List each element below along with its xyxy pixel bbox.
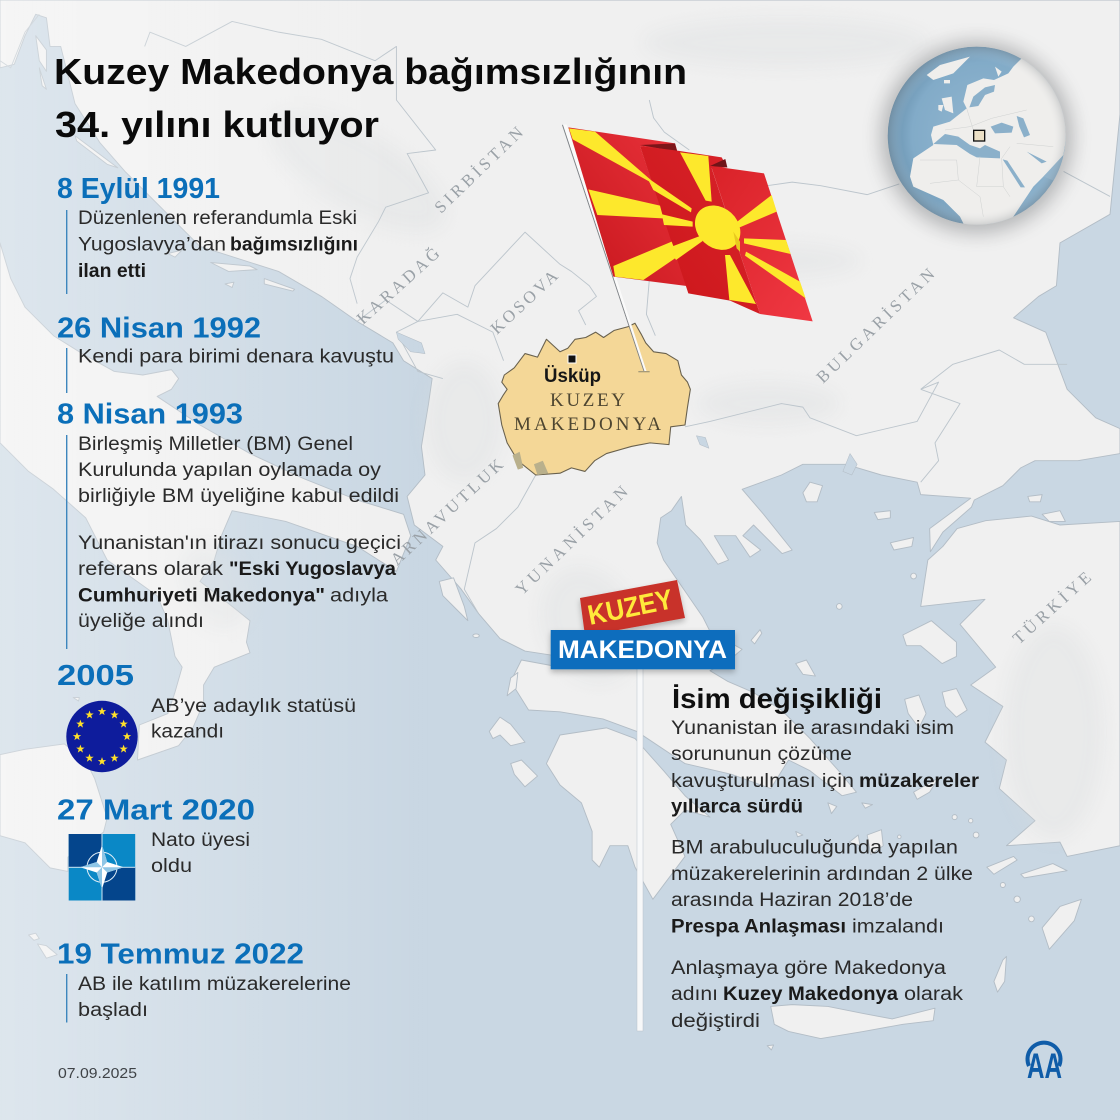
timeline entry: 2005: AB’ye adaylık statüsü (151, 696, 356, 717)
country label: Kuzey Makedonya: MAKEDONYA (514, 414, 664, 435)
timeline entry: 8 Eylül 1991: ilan etti (78, 261, 146, 282)
country label: Sırbistan: SIRBİSTAN (431, 122, 528, 217)
sign plate: Makedonya: MAKEDONYA (558, 636, 727, 664)
text block: Prespa agreement: imzalandı (852, 916, 944, 938)
panel: name change (671, 683, 980, 1032)
text block: negotiations: yıllarca sürdü (671, 796, 803, 818)
timeline entry: 27 Mart 2020: oldu (151, 856, 192, 877)
country label: Karadağ: KARADAĞ (353, 243, 444, 328)
title: Kuzey Makedonya bağımsızlığının (54, 51, 687, 92)
country label: Bulgaristan: BULGARİSTAN (813, 263, 939, 387)
text block: renaming: olarak (904, 984, 964, 1005)
timeline entry: 8 Nisan 1993: referans olarak (78, 559, 224, 580)
text block: negotiations: müzakereler (859, 771, 980, 792)
timeline entry: 8 Eylül 1991: Yugoslavya’dan (78, 234, 226, 256)
text block: renaming: adını (671, 984, 718, 1005)
city label: Üsküp: Üsküp (544, 364, 601, 387)
globe locator square (974, 130, 985, 141)
timeline entry: 2005: 2005 (57, 660, 134, 692)
text block: negotiations: sorununun çözüme (671, 744, 852, 765)
timeline entry: 8 Nisan 1993: Birleşmiş Milletler (BM) Genel (78, 434, 353, 455)
text block: Prespa agreement: BM arabuluculuğunda yapılan (671, 838, 958, 858)
timeline entry: 27 Mart 2020: 27 Mart 2020 (57, 794, 255, 826)
text block: Prespa agreement: Prespa Anlaşması (671, 916, 846, 938)
timeline entry: 8 Nisan 1993: Kurulunda yapılan oylamada oy (78, 460, 382, 481)
lakes (396, 332, 857, 475)
left side light overlay (0, 0, 430, 1120)
text block: Prespa agreement: müzakerelerinin ardından 2 ülke (671, 864, 973, 885)
heading: İsim değişikliği: İsim değişikliği (672, 683, 882, 714)
text block: renaming (671, 958, 964, 1032)
timeline entry: 2005 (57, 660, 356, 772)
timeline entry: 8 Nisan 1993: birliğiyle BM üyeliğine kabul edildi (78, 486, 399, 507)
timeline entry: 8 Nisan 1993: "Eski Yugoslavya (229, 559, 396, 580)
flag pole (562, 125, 650, 372)
country label: Arnavutluk: ARNAVUTLUK (387, 454, 508, 569)
timeline entry: 19 Temmuz 2022: başladı (78, 1000, 148, 1021)
flag of North Macedonia (562, 125, 813, 372)
timeline entry: 19 Temmuz 2022: 19 Temmuz 2022 (57, 938, 304, 970)
terrain shading (163, 18, 1104, 839)
title (54, 51, 687, 145)
timeline entry: 8 Eylül 1991: Düzenlenen referandumla Eski (78, 208, 357, 229)
timeline entry: 26 Nisan 1992: 26 Nisan 1992 (57, 312, 261, 344)
timeline entry: 19 Temmuz 2022 (57, 938, 351, 1022)
text block: renaming: Kuzey Makedonya (723, 984, 898, 1005)
country label: Kuzey Makedonya (514, 390, 664, 435)
text block: renaming: değiştirdi (671, 1011, 760, 1032)
timeline entry: 8 Eylül 1991: bağımsızlığını (230, 234, 358, 256)
sign pole (637, 665, 643, 1031)
timeline entry: 2005: kazandı (151, 722, 224, 742)
timeline entry: 8 Nisan 1993: Cumhuriyeti Makedonya" (78, 586, 325, 606)
islands (29, 578, 538, 958)
title: 34. yılını kutluyor (55, 104, 379, 145)
icon: AA logo: AA (1027, 1047, 1062, 1086)
text block: renaming: Anlaşmaya göre Makedonya (671, 958, 946, 979)
North Macedonia highlighted on map (498, 323, 690, 475)
timeline entry: 8 Nisan 1993: adıyla (330, 586, 388, 606)
timeline entry: 27 Mart 2020 (57, 794, 255, 900)
timeline entry: 8 Nisan 1993: 8 Nisan 1993 (57, 398, 243, 430)
timeline entry: 8 Nisan 1993: üyeliğe alındı (78, 611, 204, 632)
text block: Prespa agreement (671, 838, 973, 938)
country label: Türkiye: TÜRKİYE (1009, 567, 1096, 648)
timeline entry: 26 Nisan 1992 (57, 312, 394, 393)
street sign: Kuzey Makedonya (551, 580, 735, 669)
borders (0, 14, 1110, 614)
icon: NATO flag (69, 834, 135, 900)
timeline entry: 8 Eylül 1991: 8 Eylül 1991 (57, 173, 220, 205)
sign plate: Kuzey: KUZEY (585, 583, 676, 631)
globe (881, 41, 1077, 233)
country label: Kuzey Makedonya: KUZEY (550, 390, 628, 411)
icon: AA logo (1027, 1043, 1062, 1086)
text block: Prespa agreement: arasında Haziran 2018’de (671, 890, 913, 911)
timeline entry: 8 Nisan 1993: Yunanistan'ın itirazı sonucu geçici (78, 533, 401, 554)
country label: Kosova: KOSOVA (487, 265, 563, 338)
timeline entry: 27 Mart 2020: Nato üyesi (151, 830, 250, 851)
country label: Yunanistan: YUNANİSTAN (512, 481, 633, 599)
text block: negotiations: Yunanistan ile arasındaki isim (671, 718, 954, 739)
lake patches (513, 452, 548, 475)
sign plate: Makedonya (551, 630, 735, 669)
timeline entry: 8 Eylül 1991 (57, 173, 358, 294)
text block: negotiations: kavuşturulması için (671, 771, 854, 792)
text block: negotiations (671, 718, 980, 818)
timeline entry: 19 Temmuz 2022: AB ile katılım müzakerelerine (78, 974, 351, 995)
timeline entry: 26 Nisan 1992: Kendi para birimi denara kavuştu (78, 346, 394, 368)
timeline entry: 8 Nisan 1993 (57, 398, 401, 649)
icon: EU flag circle (66, 701, 138, 772)
date: 07.09.2025 (58, 1066, 137, 1082)
capital marker: Üsküp (568, 355, 576, 363)
